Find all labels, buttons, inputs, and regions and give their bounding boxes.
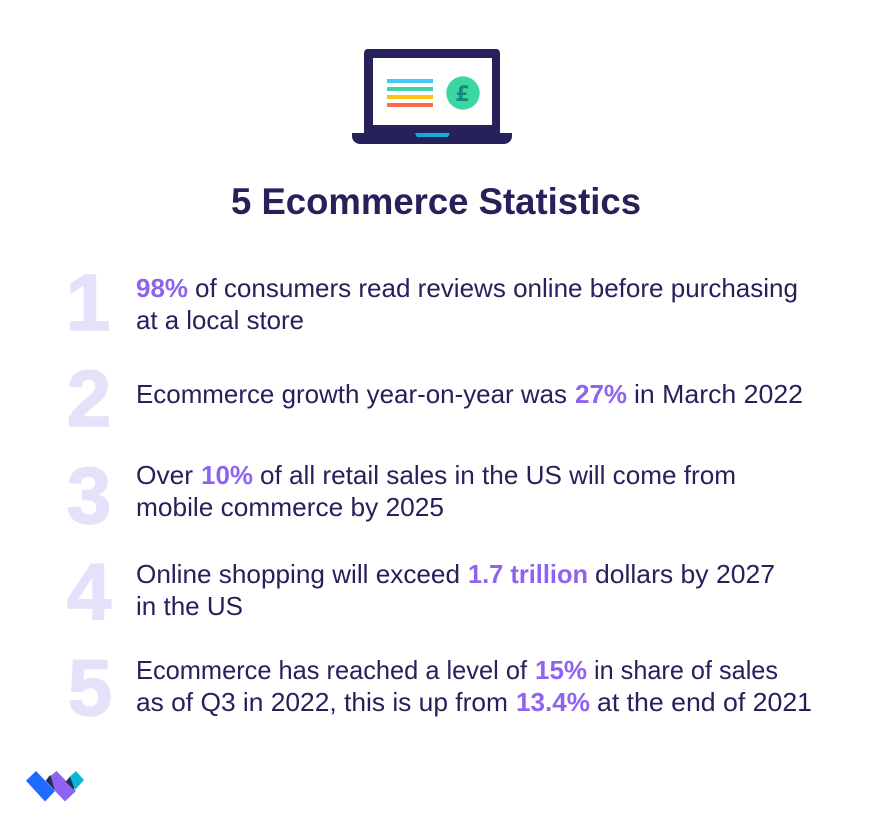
statistic 4: dollars by 2027 <box>595 559 775 589</box>
statistic 4: 1.7 trillion <box>468 559 588 589</box>
statistic 5: at the end of 2021 <box>597 687 812 717</box>
logo <box>26 771 84 802</box>
title: 5 Ecommerce Statistics <box>231 181 641 222</box>
statistic 2: 27% <box>575 379 627 409</box>
statistic 4: in the US <box>136 591 243 621</box>
statistic 5: in share of sales <box>594 655 778 685</box>
statistic 4: 4 <box>67 547 112 636</box>
statistic 5: as of Q3 in 2022, this is up from <box>136 687 508 717</box>
statistic 3: 10% <box>201 460 253 490</box>
statistic 4 <box>67 547 775 636</box>
statistic 5: 13.4% <box>516 687 590 717</box>
icon: laptop with pound sign: £ <box>455 82 470 106</box>
statistic 1: at a local store <box>136 305 304 335</box>
statistic 1: of consumers read reviews online before purchasing <box>195 273 798 303</box>
statistic 5: 5 <box>68 643 112 732</box>
statistic 2: 2 <box>67 354 111 443</box>
statistic 1: 1 <box>66 258 110 347</box>
statistic 2: Ecommerce growth year-on-year was <box>136 379 567 409</box>
statistic 5: Ecommerce has reached a level of <box>136 655 528 685</box>
statistic 3: 3 <box>67 451 111 540</box>
statistic 2: in March 2022 <box>634 379 803 409</box>
statistic 3: Over <box>136 460 193 490</box>
icon: laptop with pound sign <box>352 49 512 144</box>
statistic 4: Online shopping will exceed <box>136 559 460 589</box>
statistic 5: 15% <box>535 655 587 685</box>
statistic 1 <box>66 258 798 347</box>
statistic 3: mobile commerce by 2025 <box>136 492 444 522</box>
statistic 3 <box>67 451 736 540</box>
statistic 3: of all retail sales in the US will come from <box>260 460 736 490</box>
statistic 1: 98% <box>136 273 188 303</box>
statistic 5 <box>68 643 812 732</box>
statistic 2 <box>67 354 803 443</box>
